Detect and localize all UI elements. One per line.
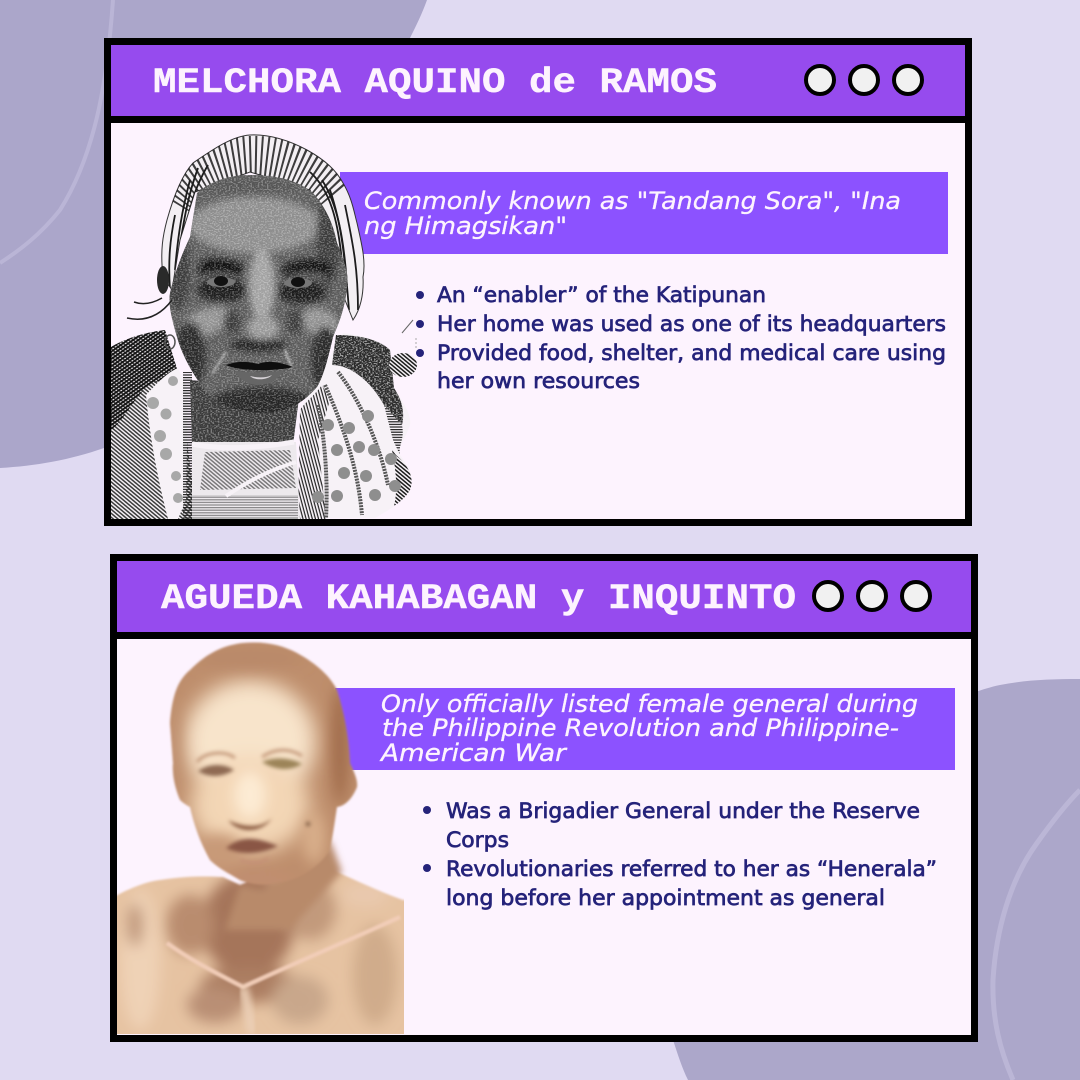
shoulders and dress	[117, 872, 404, 1034]
bullet list	[416, 283, 946, 393]
ear and loose hair	[127, 266, 175, 349]
bullet list: Revolutionaries referred to her as “Henerala”	[446, 857, 937, 881]
window dots	[814, 582, 930, 610]
bullet list: Corps	[446, 828, 509, 852]
bullet list: Her home was used as one of its headquarters	[437, 312, 946, 336]
heading: Melchora Aquino de Ramos: MELCHORA AQUINO de RAMOS	[153, 63, 717, 103]
quote band: Commonly known as "Tandang Sora", "Ina	[364, 187, 901, 215]
hair	[162, 135, 364, 320]
right shawl	[298, 330, 412, 519]
bullet list: her own resources	[437, 369, 640, 393]
bullet list: An “enabler” of the Katipunan	[437, 283, 766, 307]
header bar	[117, 561, 971, 639]
bullet list: long before her appointment as general	[446, 886, 885, 910]
card frame	[108, 42, 968, 522]
heading: Agueda Kahabagan y Inquinto: AGUEDA KAHABAGAN y INQUINTO	[161, 579, 796, 619]
background blob: bottom right	[673, 679, 1080, 1080]
panel: Agueda Kahabagan card	[110, 558, 974, 1045]
quote band	[335, 688, 955, 770]
bullet list: Was a Brigadier General under the Reserve	[446, 799, 920, 823]
bullet list	[423, 799, 937, 910]
portrait: engraving of Melchora Aquino	[111, 135, 417, 519]
quote band	[340, 172, 948, 254]
portrait: photograph of Agueda Kahabagan	[110, 640, 412, 1045]
face	[169, 175, 348, 414]
header bar	[111, 45, 965, 123]
quote band: ng Himagsikan"	[364, 212, 567, 240]
mouth	[226, 362, 293, 385]
panel: Melchora Aquino card	[108, 42, 968, 522]
neck	[225, 840, 342, 930]
quote band: Only officially listed female general during	[381, 690, 918, 718]
left shawl	[111, 330, 197, 519]
window dots	[806, 66, 922, 94]
bullet list: Provided food, shelter, and medical care using	[437, 341, 946, 365]
quote band: the Philippine Revolution and Philippine-	[382, 714, 899, 742]
head	[160, 640, 360, 890]
eyes	[207, 276, 312, 288]
stray engraving marks	[389, 320, 417, 377]
background blob: top left	[0, 0, 427, 468]
neck and blouse	[190, 380, 300, 519]
quote band: American War	[379, 739, 568, 767]
card frame	[114, 558, 974, 1038]
